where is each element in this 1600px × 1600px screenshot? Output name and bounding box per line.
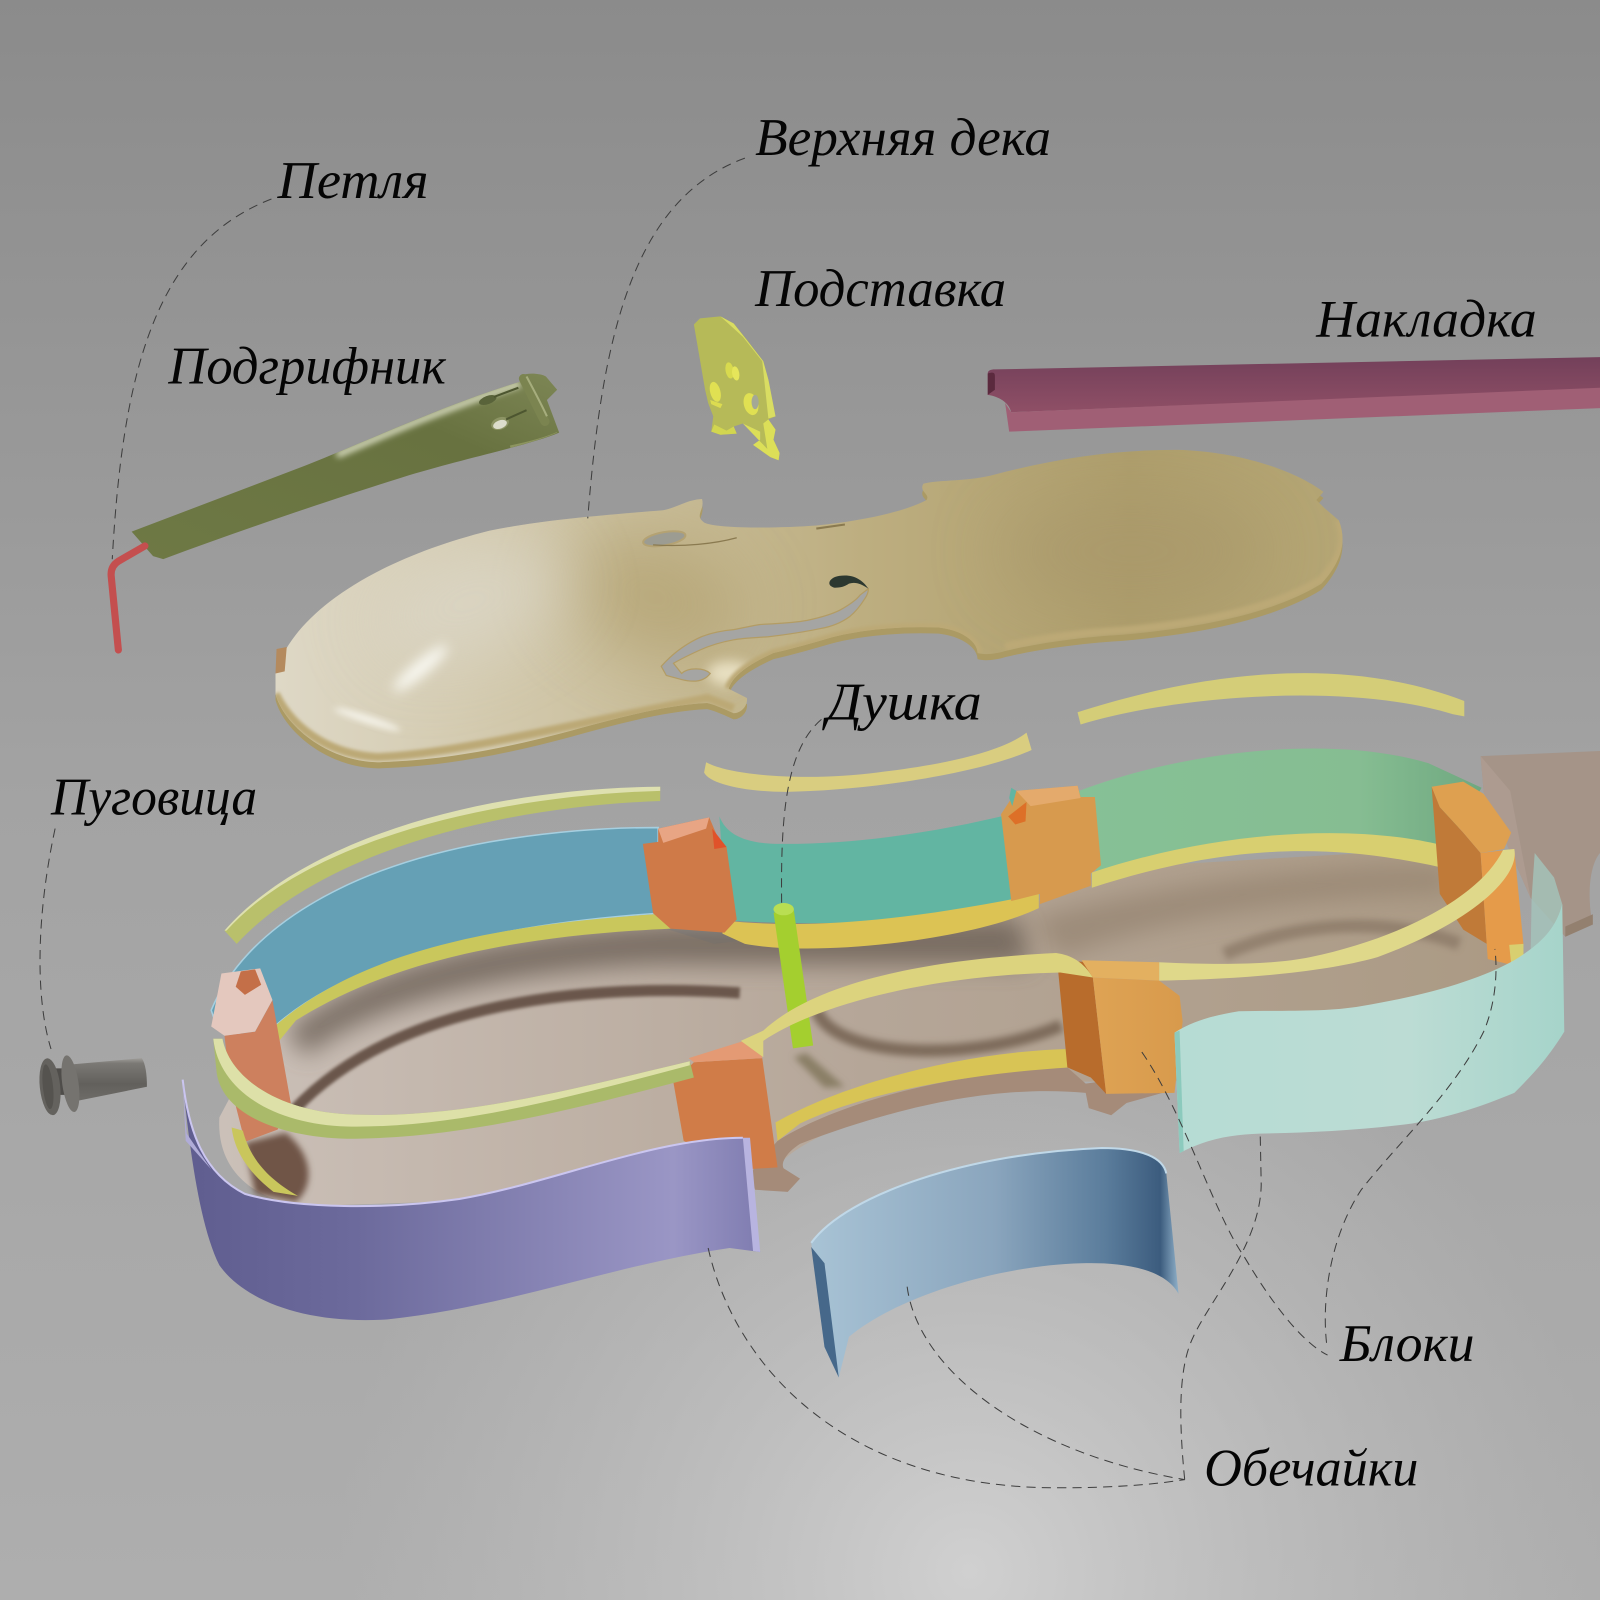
dark sound hole xyxy=(829,576,868,589)
leader: mint rib xyxy=(1181,1134,1261,1480)
rib: centre teal xyxy=(719,814,1020,923)
leader: loop xyxy=(112,199,271,559)
plate shading xyxy=(276,500,1342,757)
floating lining: top right xyxy=(1078,673,1464,724)
label: Накладка: Накладка xyxy=(1315,291,1537,349)
rib: lower centre blue xyxy=(811,1148,1179,1378)
leader lines xyxy=(40,158,1496,1488)
lining: upper left xyxy=(276,913,671,1043)
leader: right end block xyxy=(1325,949,1496,1343)
lining stub: right xyxy=(1509,944,1523,964)
back plate rim xyxy=(750,1067,1173,1192)
block: lower right corner xyxy=(1057,960,1183,1094)
end pin notch xyxy=(276,647,287,673)
neck block xyxy=(1481,751,1600,937)
block: right end xyxy=(1432,782,1523,964)
rib: upper right green xyxy=(1071,749,1482,872)
block: lower left corner xyxy=(673,1036,778,1169)
leader: top plate xyxy=(588,158,745,518)
end button xyxy=(37,1054,147,1116)
block: upper right corner xyxy=(1001,786,1101,904)
rib: lower left lilac xyxy=(183,1080,760,1320)
bridge xyxy=(694,316,780,460)
rib: upper left blue xyxy=(211,828,658,1046)
block: upper left corner xyxy=(643,817,737,933)
upper f-hole xyxy=(642,529,687,549)
lining: centre xyxy=(722,894,1039,948)
floating lining: left xyxy=(224,787,660,944)
lining: upper right xyxy=(1092,833,1441,888)
leader: end button xyxy=(40,829,55,1049)
fingerboard xyxy=(988,357,1600,432)
rib: lower right mint xyxy=(1174,853,1564,1153)
tailpiece loop xyxy=(111,546,145,650)
label: Обечайки: Обечайки xyxy=(1204,1440,1418,1498)
tailpiece xyxy=(132,374,559,559)
label: Блоки: Блоки xyxy=(1339,1315,1474,1373)
block: left end xyxy=(211,968,291,1142)
soundpost xyxy=(773,903,803,1047)
lining: lower left front xyxy=(213,1039,694,1139)
leader: soundpost xyxy=(782,719,821,903)
label: Петля: Петля xyxy=(277,152,429,210)
floating lining: centre xyxy=(704,733,1032,792)
leader: lilac rib xyxy=(708,1248,1185,1488)
top plate xyxy=(276,450,1342,768)
lining: lower left rear xyxy=(232,1128,298,1196)
label: Подгрифник: Подгрифник xyxy=(167,338,447,396)
lining: lower right xyxy=(1159,849,1515,981)
lining: lower right centre xyxy=(741,953,1093,1057)
label: Пуговица: Пуговица xyxy=(50,768,257,826)
back plate floor xyxy=(219,847,1515,1206)
leader: lower right block xyxy=(1142,1052,1328,1355)
leader: blue rib xyxy=(907,1287,1185,1480)
label: Душка: Душка xyxy=(821,673,982,731)
label: Подставка: Подставка xyxy=(754,260,1006,318)
label: Верхняя дека: Верхняя дека xyxy=(755,109,1051,167)
lining: lower centre xyxy=(776,1049,1070,1141)
floor shadows xyxy=(245,867,1459,1202)
lower f-hole xyxy=(661,589,868,681)
